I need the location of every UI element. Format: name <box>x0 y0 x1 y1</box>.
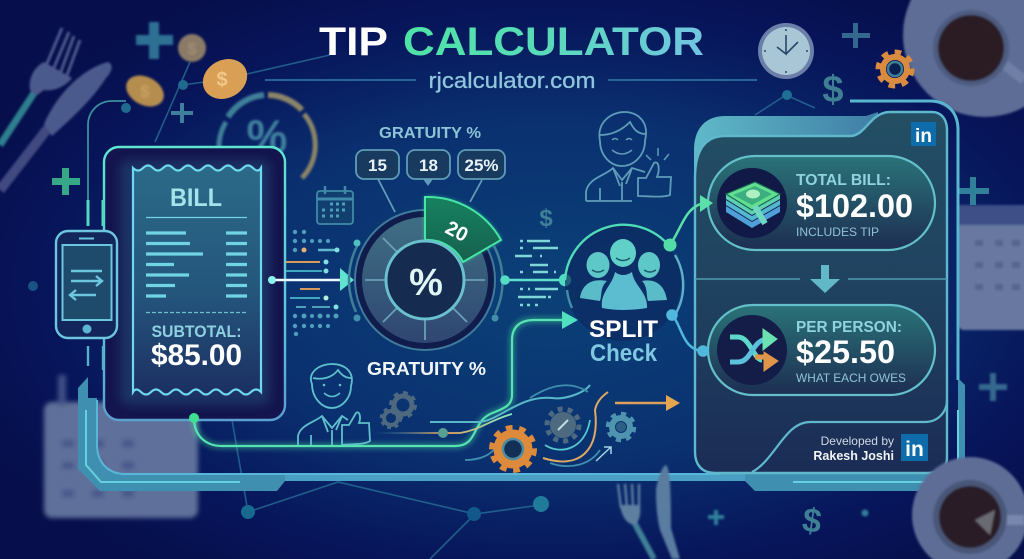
data dashes right of gauge <box>515 241 558 305</box>
icon: percent ring: % <box>247 110 287 162</box>
developer credit: Rakesh Joshi <box>813 449 894 463</box>
icon: coffee cup top right <box>903 0 1024 117</box>
split check circle <box>565 225 683 367</box>
card: per person: WHAT EACH OWES <box>796 371 906 385</box>
icon: plus small <box>171 103 193 123</box>
icon: coin right: $ <box>216 69 228 91</box>
gratuity header: GRATUITY % <box>379 125 481 142</box>
icon: person bottom <box>298 364 370 446</box>
icon: gear grey <box>547 409 579 441</box>
receipt: $85.00 <box>151 339 242 372</box>
icon: fork bottom <box>618 484 654 559</box>
icon: coin small <box>178 34 206 62</box>
icon: dollar top right: $ <box>822 69 844 111</box>
icon: clock <box>758 23 814 79</box>
receipt: SUBTOTAL: <box>152 323 242 341</box>
card: total bill: TOTAL BILL: <box>796 172 891 189</box>
option chips: 15 <box>368 156 387 175</box>
developer credit <box>813 434 928 463</box>
main frame <box>78 101 965 491</box>
connector: gauge to split <box>500 274 571 286</box>
results panel <box>694 112 947 473</box>
arrow: bill to split check <box>189 311 578 446</box>
split check circle: SPLIT <box>589 316 658 343</box>
card: per person <box>708 305 935 395</box>
icon: fork top left <box>0 28 80 145</box>
icon: plus green <box>52 168 80 195</box>
swirl lines <box>375 385 608 466</box>
developer credit: Developed by <box>821 434 894 448</box>
arrow: orange <box>615 395 680 411</box>
icon: coin right <box>196 51 254 107</box>
arrow down with divider <box>695 265 947 293</box>
icon: coin left: $ <box>140 82 150 101</box>
card: per person: $25.50 <box>796 334 895 370</box>
card: per person: PER PERSON: <box>796 319 902 336</box>
icon: small grey gears <box>382 393 415 428</box>
icon: blurred calendar right <box>958 205 1024 330</box>
gauge dial <box>349 197 503 350</box>
sparkle dot <box>862 510 868 516</box>
icon: gear blue <box>608 414 634 440</box>
split check circle: Check <box>590 340 658 367</box>
bill frame <box>104 147 285 420</box>
icon: plus large <box>136 22 173 59</box>
icon: plus top right <box>842 23 870 48</box>
icon: coffee cup bottom right <box>912 457 1024 559</box>
linkedin badge top: in <box>915 126 932 147</box>
subtitle url: rjcalculator.com <box>428 68 596 93</box>
receipt <box>133 166 261 394</box>
network lines background <box>28 55 815 559</box>
icon: knife top left <box>0 62 112 190</box>
icon: blurred calendar left <box>44 375 198 518</box>
icon: plus right <box>957 177 989 205</box>
icon: person top <box>586 112 671 201</box>
receipt: BILL <box>170 184 222 212</box>
developer credit: in <box>905 438 924 461</box>
icon: plus bottom <box>708 510 724 525</box>
linkedin badge top <box>911 122 936 147</box>
selected wedge 20 <box>425 197 501 262</box>
arrow: small white <box>596 447 611 461</box>
icon: phone <box>56 200 117 370</box>
icon: gear orange <box>492 428 534 470</box>
icon: group of people <box>580 239 667 310</box>
arrow: split to per person <box>666 309 709 357</box>
icon: money stack <box>717 168 787 238</box>
card: total bill: INCLUDES TIP <box>796 225 879 239</box>
card: total bill <box>708 156 935 250</box>
icon: gear orange top right <box>878 52 912 86</box>
icon: knife bottom <box>656 465 680 559</box>
selected wedge 20: 20 <box>442 217 472 247</box>
option chips: 25% <box>464 156 499 175</box>
option chips <box>356 150 505 212</box>
data dots left of gauge <box>286 230 340 336</box>
card: total bill: $102.00 <box>796 188 913 224</box>
icon: dollar middle: $ <box>539 205 553 232</box>
arrow: split to total bill <box>664 195 713 252</box>
icon: calendar <box>317 186 353 224</box>
gauge dial: % <box>409 262 443 304</box>
icon: dollar bottom: $ <box>800 501 824 541</box>
title: TIP <box>319 20 388 64</box>
icon: coin left <box>121 69 169 113</box>
option chips: 18 <box>419 156 438 175</box>
gratuity label: GRATUITY % <box>367 359 486 379</box>
icon: percent ring <box>219 95 315 178</box>
title: CALCULATOR <box>403 20 704 64</box>
icon: shuffle arrows <box>717 315 787 385</box>
icon: coin small: $ <box>188 41 197 58</box>
icon: plus right lower <box>979 373 1007 401</box>
arrow: bill to gauge <box>268 268 354 291</box>
